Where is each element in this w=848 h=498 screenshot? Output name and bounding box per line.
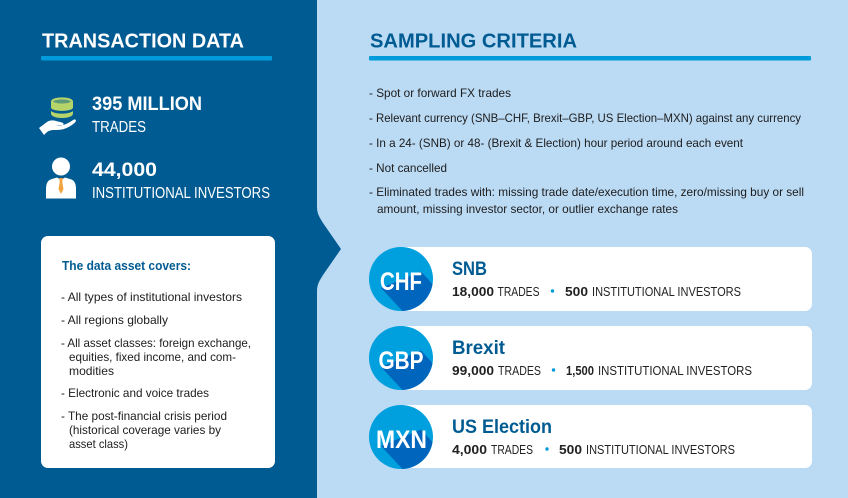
callout list: modities (69, 364, 114, 378)
stats: Brexit: 99,000 (452, 363, 494, 378)
callout list: - All types of institutional investors (61, 290, 242, 304)
callout list: - All regions globally (61, 313, 168, 327)
stats: US Election: INSTITUTIONAL INVESTORS (586, 442, 735, 457)
stats: US Election (452, 442, 735, 457)
stat: 44,000 institutional investors: INSTITUTIONAL INVESTORS (92, 185, 270, 202)
heading: transaction data (41, 30, 272, 60)
icon: coins on hand (39, 97, 76, 135)
callout list: (historical coverage varies by (69, 423, 221, 437)
criteria list: - Not cancelled (369, 161, 447, 175)
heading: transaction data: TRANSACTION DATA (42, 30, 244, 52)
stats: Brexit: 1,500 (566, 363, 594, 378)
heading: sampling criteria (369, 30, 811, 60)
badge: MXN: MXN (376, 426, 427, 454)
criteria list (369, 86, 804, 216)
card: US Election: US Election (452, 416, 552, 438)
card: SNB (369, 247, 812, 311)
stats: Brexit (452, 363, 752, 378)
callout list: asset class) (69, 437, 128, 451)
badge: CHF (369, 247, 433, 311)
criteria list: - Eliminated trades with: missing trade date/execution time, zero/missing buy or sell (369, 185, 804, 199)
stat: 395 million trades (92, 94, 202, 136)
stats: US Election: 4,000 (452, 442, 487, 457)
callout: data asset covers (41, 236, 275, 468)
icon: investor (46, 158, 76, 198)
stats: SNB: TRADES (498, 284, 540, 299)
stats: US Election: TRADES (491, 442, 533, 457)
panel: transaction data (0, 0, 341, 498)
stat: 44,000 institutional investors: 44,000 (92, 160, 157, 181)
stats: Brexit: TRADES (498, 363, 541, 378)
stat: 44,000 institutional investors (92, 160, 270, 202)
stats: US Election: 500 (559, 442, 582, 457)
card: Brexit: Brexit (452, 337, 505, 359)
criteria list: amount, missing investor sector, or outlier exchange rates (377, 202, 678, 216)
callout list: - Electronic and voice trades (61, 386, 209, 400)
callout list: - The post-financial crisis period (61, 409, 227, 423)
callout list: - All asset classes: foreign exchange, (61, 336, 251, 350)
badge: GBP: GBP (378, 347, 424, 375)
card: US Election (369, 405, 812, 469)
stat: 395 million trades: 395 MILLION (92, 94, 202, 115)
badge: GBP (369, 326, 433, 390)
criteria list: - Spot or forward FX trades (369, 86, 511, 100)
callout heading: The data asset covers: (62, 259, 191, 273)
callout list (61, 290, 251, 451)
heading: sampling criteria: SAMPLING CRITERIA (370, 30, 577, 52)
stats: SNB: 500 (565, 284, 588, 299)
stats: SNB: 18,000 (452, 284, 494, 299)
badge: MXN (369, 405, 433, 469)
criteria list: - Relevant currency (SNB–CHF, Brexit–GBP, US Election–MXN) against any currency (369, 111, 801, 125)
badge: CHF: CHF (380, 268, 422, 296)
stats: SNB (452, 284, 741, 299)
criteria list: - In a 24- (SNB) or 48- (Brexit & Election) hour period around each event (369, 136, 744, 150)
callout list: equities, fixed income, and com- (69, 350, 236, 364)
card: Brexit (369, 326, 812, 390)
stats: Brexit: INSTITUTIONAL INVESTORS (598, 363, 752, 378)
stats: SNB: INSTITUTIONAL INVESTORS (592, 284, 741, 299)
stat: 395 million trades: TRADES (92, 119, 146, 136)
card: SNB: SNB (452, 258, 487, 280)
